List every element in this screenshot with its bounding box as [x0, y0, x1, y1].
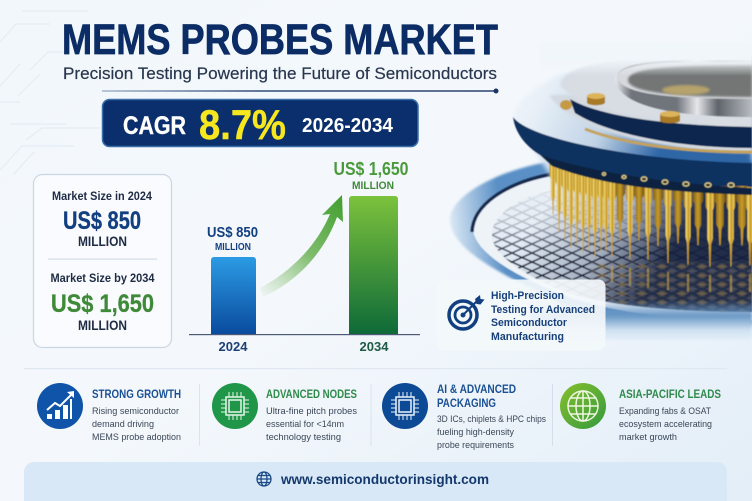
description: market growth [619, 432, 677, 443]
silver plate [560, 56, 752, 127]
icon: chip [212, 383, 258, 429]
2024 value: US$ 850 [63, 207, 141, 235]
heading: AI & ADVANCED [437, 382, 516, 396]
ring top surface [618, 62, 752, 99]
callout [436, 280, 606, 350]
footer bar [24, 462, 727, 501]
bar chart [189, 159, 420, 354]
wafer top fade [492, 187, 747, 254]
icon: processor [382, 383, 428, 429]
ring hole gold [662, 85, 710, 95]
CAGR banner [102, 100, 418, 148]
circuit pattern [0, 11, 100, 174]
callout text: Testing for Advanced [491, 304, 595, 316]
icon: web globe [257, 472, 271, 486]
title: MEMS PROBES MARKET [62, 16, 498, 64]
top soft fade [540, 42, 752, 76]
axis [189, 334, 420, 335]
description [619, 406, 712, 443]
description [437, 414, 546, 451]
front pins [549, 163, 752, 267]
title rule with dot [102, 88, 498, 94]
description: Expanding fabs & OSAT [619, 406, 711, 417]
wafer edge [473, 170, 752, 320]
ring hole [628, 65, 752, 97]
market size card [34, 174, 172, 348]
website: www.semiconductorinsight.com [280, 471, 489, 487]
navy disc edge [513, 117, 752, 190]
description: Rising semiconductor [92, 406, 179, 417]
2024 unit: MILLION [78, 233, 127, 249]
description: fueling high-density [437, 427, 514, 438]
subtitle: Precision Testing Powering the Future of Semiconductors [63, 64, 497, 83]
wafer dark tone [520, 188, 752, 312]
heading: STRONG GROWTH [92, 387, 181, 401]
2034 label: Market Size by 2034 [50, 271, 155, 285]
axis label 2034: 2034 [360, 339, 389, 354]
probe socket band [540, 155, 752, 195]
wafer chuck ring [450, 160, 752, 325]
callout text: Manufacturing [491, 331, 564, 343]
bar 2024 [211, 257, 256, 334]
feature: strong growth [37, 383, 181, 443]
callout text: Semiconductor [491, 317, 568, 329]
description: essential for <14nm [266, 419, 344, 430]
bar value 2034: US$ 1,650 [334, 159, 408, 179]
CAGR period: 2026-2034 [302, 115, 394, 137]
CAGR value: 8.7% [199, 101, 286, 148]
description: ecosystem accelerating [619, 419, 712, 430]
dark band [570, 99, 752, 148]
photo: probe card over wafer [450, 42, 752, 340]
heading [437, 382, 516, 410]
2034 value: US$ 1,650 [51, 290, 154, 318]
2034 unit: MILLION [78, 317, 127, 333]
brass screws [560, 93, 680, 123]
disc top surface [513, 60, 752, 190]
heading: ASIA-PACIFIC LEADS [619, 387, 721, 401]
callout text: High-Precision [491, 290, 564, 302]
growth arrow [260, 195, 343, 297]
lower plate step [550, 95, 752, 153]
bar value 2024: US$ 850 [207, 224, 258, 241]
description [92, 406, 181, 443]
description: technology testing [266, 432, 341, 443]
wafer shadow [472, 174, 552, 232]
description: 3D ICs, chiplets & HPC chips [437, 414, 546, 425]
icon: growth chart [37, 383, 83, 429]
back pins [615, 178, 748, 246]
icon: target [449, 295, 484, 329]
bar unit 2024: MILLION [215, 242, 251, 253]
description: probe requirements [437, 440, 514, 451]
heading: PACKAGING [437, 396, 496, 410]
wafer grid [492, 188, 752, 312]
description: Ultra-fine pitch probes [266, 406, 357, 417]
bar unit 2034: MILLION [352, 180, 394, 192]
feature: AI and advanced packaging [382, 382, 546, 451]
description: MEMS probe adoption [92, 432, 181, 443]
photo bottom fade [530, 300, 752, 340]
feature: advanced nodes [212, 383, 357, 443]
wafer gold reflection [590, 262, 752, 312]
callout text [491, 290, 595, 343]
heading: ADVANCED NODES [266, 387, 357, 401]
icon: globe [560, 383, 606, 429]
feature: Asia-Pacific leads [560, 383, 721, 443]
silver ring [615, 60, 752, 117]
description: demand driving [92, 419, 154, 430]
bar 2034 [349, 196, 398, 334]
gold seam [585, 129, 752, 152]
axis label 2024: 2024 [219, 339, 248, 354]
description [266, 406, 357, 443]
2024 label: Market Size in 2024 [52, 189, 152, 203]
CAGR label: CAGR [123, 112, 186, 140]
pin reflections [612, 266, 750, 292]
